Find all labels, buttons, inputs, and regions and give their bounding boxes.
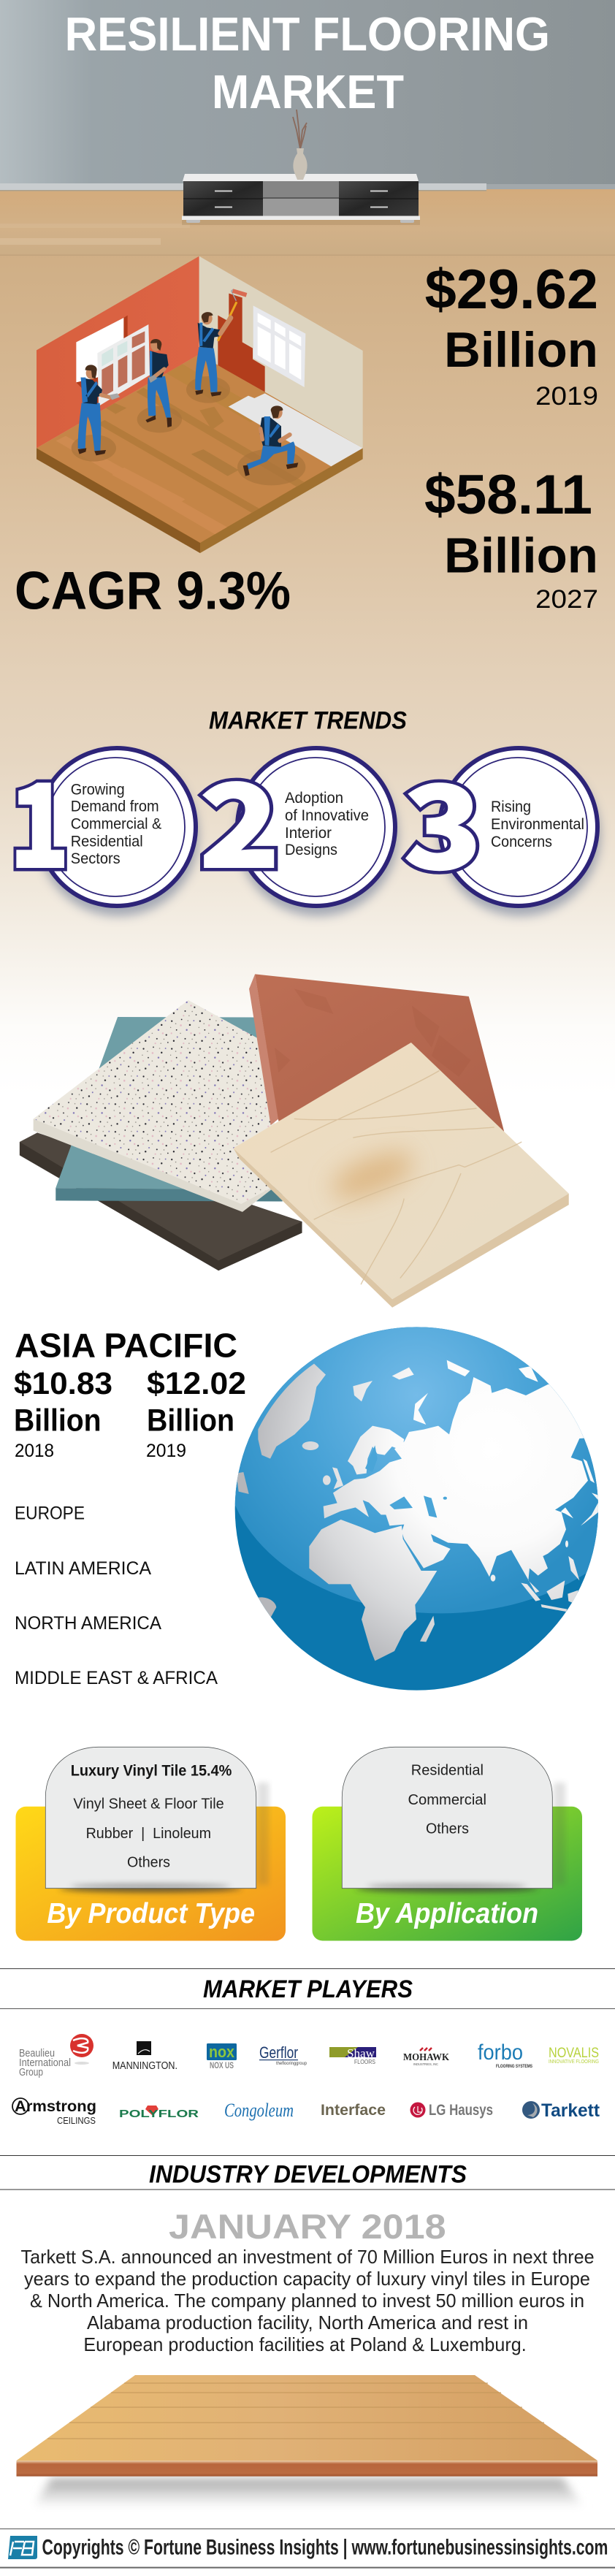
logo: Novalis: NOVALIS [549, 2046, 599, 2061]
other regions list: EUROPE [15, 1504, 85, 1524]
regional heading: Asia Pacific: ASIA PACIFIC [15, 1326, 237, 1364]
trend 1 text: Sectors [71, 850, 121, 867]
development description [20, 2246, 595, 2355]
logo: Beaulieu: Group [19, 2067, 43, 2078]
logo: Tarkett: Tarkett [541, 2100, 600, 2121]
trend 2 text: Interior [285, 825, 332, 842]
market size 2019 [425, 259, 598, 411]
trend 1 [9, 734, 199, 916]
tab with segment list: Commercial [408, 1791, 486, 1808]
tab with segment list [45, 1747, 256, 1889]
market size 2027: Billion [444, 528, 598, 584]
title: RESILIENT FLOORING [65, 7, 550, 61]
regional heading: Asia Pacific: $12.02 [147, 1366, 246, 1401]
worker 2 [137, 339, 182, 432]
trend 2 text: Adoption [285, 790, 343, 807]
other regions list: MIDDLE EAST & AFRICA [15, 1668, 218, 1688]
tab with segment list: Others [127, 1854, 170, 1870]
tab with segment list: Others [426, 1821, 469, 1837]
regional heading: Asia Pacific: 2018 [15, 1441, 54, 1461]
trend 2 text: of Innovative [285, 807, 369, 824]
card: by application [313, 1747, 582, 1940]
beige wall [199, 256, 363, 448]
logo: Beaulieu: International [19, 2057, 71, 2069]
other regions list: LATIN AMERICA [15, 1558, 151, 1579]
red wall [37, 256, 199, 448]
numeral 2: 2 [199, 733, 280, 901]
logo: Beaulieu: Beaulieu [19, 2048, 55, 2059]
floor slab [37, 448, 363, 553]
card label: By Product Type [47, 1898, 255, 1929]
tab shadow [59, 1884, 242, 1893]
logo: LG Hausys: LG Hausys [429, 2102, 493, 2119]
company logos [12, 2034, 600, 2126]
globe [235, 1327, 598, 1691]
beige marble tile [234, 1043, 569, 1308]
logo: NOX US [207, 2043, 237, 2070]
logo: NOX US: NOX US [210, 2060, 234, 2070]
development date: JANUARY 2018 [169, 2207, 446, 2246]
trend 1 text: Growing [71, 781, 125, 798]
trend 3 text: Environmental [491, 816, 584, 833]
trend 3 text: Concerns [491, 834, 552, 850]
development description: Alabama production facility, North America and rest in [87, 2312, 528, 2333]
wooden plank shelf [16, 2375, 597, 2507]
heading: market players: MARKET PLAYERS [203, 1975, 413, 2003]
dark tile [20, 1132, 302, 1270]
logo: LG Hausys [410, 2102, 493, 2119]
regional heading: Asia Pacific: $10.83 [14, 1366, 112, 1401]
logo: Mohawk: INDUSTRIES, INC [413, 2062, 439, 2066]
logo: Forbo: FLOORING SYSTEMS [496, 2064, 532, 2069]
wall [0, 0, 615, 186]
window opening in red wall [76, 316, 128, 404]
terracotta tile [249, 974, 504, 1132]
teal tile [56, 1017, 283, 1202]
tab bottom shading [367, 1883, 527, 1889]
worker 3 with roller [186, 289, 247, 403]
trend 2 [199, 733, 398, 916]
title [65, 7, 550, 118]
regional heading: Asia Pacific: Billion [147, 1403, 234, 1438]
numeral 3: 3 [403, 735, 482, 902]
floor [0, 189, 615, 256]
logo: NOX US: nox [209, 2043, 235, 2061]
market size 2027: 2027 [535, 585, 598, 614]
heading: market trends: MARKET TRENDS [209, 707, 407, 735]
development description: European production facilities at Poland & Luxemburg. [83, 2333, 527, 2355]
painted patch on beige wall [218, 294, 265, 392]
market size 2019: Billion [444, 322, 598, 378]
logo: Beaulieu [19, 2034, 93, 2078]
white tile patch on floor [229, 393, 363, 466]
tab with segment list: Residential [411, 1762, 484, 1779]
title: MARKET [212, 65, 404, 118]
card: by product type [16, 1747, 286, 1940]
numeral 1: 1 [9, 734, 69, 901]
logo: Mohawk: MOHAWK [403, 2052, 449, 2063]
tab shadow [356, 1884, 538, 1893]
vase with branches [293, 110, 308, 180]
trend 1 text: Residential [71, 833, 143, 850]
footer [8, 2535, 608, 2560]
regional heading: Asia Pacific: Billion [14, 1403, 102, 1438]
card label: By Application [356, 1898, 538, 1929]
logo: Novalis: INNOVATIVE FLOORING [549, 2058, 599, 2065]
regional heading: Asia Pacific [14, 1326, 246, 1461]
tab with segment list: Luxury Vinyl Tile 15.4% [71, 1762, 232, 1779]
cabinet [182, 174, 420, 225]
logo: Armstrong Ceilings [12, 2098, 96, 2126]
tab bottom shading [70, 1883, 231, 1889]
trend 1 text: Demand from [71, 798, 159, 815]
speckled terrazzo tile [34, 1000, 275, 1212]
logo: Shaw Floors [329, 2046, 376, 2065]
logo: Armstrong Ceilings: CEILINGS [57, 2115, 96, 2126]
land masses [236, 1360, 604, 1661]
tab with segment list: Vinyl Sheet & Floor Tile [73, 1796, 224, 1813]
trend 3 [403, 735, 600, 916]
worker 1 [72, 365, 120, 462]
market size 2019: 2019 [535, 382, 598, 411]
page background gradient [0, 248, 615, 1198]
logo: Mannington [112, 2041, 177, 2072]
logo: Gerflor: theflooringgroup [276, 2062, 308, 2066]
logo: Armstrong Ceilings: Armstrong [15, 2098, 96, 2115]
trend 1 text [71, 781, 161, 867]
logo: Congoleum: Congoleum [224, 2100, 294, 2121]
other regions list [15, 1504, 218, 1688]
logo: Mannington: MANNINGTON. [112, 2059, 177, 2072]
logo: Gerflor: Gerflor [259, 2043, 298, 2062]
logo: Shaw Floors: Shaw [347, 2046, 375, 2060]
logo: Polyflor [119, 2106, 199, 2120]
numeral 2: 2 [199, 733, 280, 901]
numeral 1: 1 [9, 734, 69, 901]
heading: industry developments: INDUSTRY DEVELOPMENTS [149, 2161, 467, 2189]
inland seas [365, 1445, 447, 1517]
trend 2 text [285, 790, 369, 858]
wall window [253, 305, 305, 387]
trend 1 text: Commercial & [71, 815, 161, 832]
worker 4 kneeling [237, 405, 305, 485]
market size 2027: $58.11 [424, 464, 592, 526]
other regions list: NORTH AMERICA [15, 1613, 161, 1634]
CAGR: CAGR 9.3% [15, 561, 291, 621]
isometric room illustration [37, 256, 363, 553]
logo: Forbo: forbo [478, 2040, 523, 2065]
flooring tile samples [20, 974, 569, 1308]
development description: years to expand the production capacity of luxury vinyl tiles in Europe [24, 2268, 590, 2290]
tab with segment list: Rubber | Linoleum [86, 1825, 211, 1842]
market size 2027 [424, 464, 598, 614]
development description: & North America. The company planned to invest 50 million euros in [30, 2290, 584, 2312]
tab with segment list [342, 1747, 552, 1889]
header room scene [0, 0, 615, 256]
skirting [0, 183, 486, 191]
logo: Interface: Interface [321, 2102, 386, 2119]
market size 2019: $29.62 [425, 259, 598, 321]
numeral 3: 3 [403, 735, 482, 902]
development description: Tarkett S.A. announced an investment of 70 Million Euros in next three [20, 2246, 595, 2268]
logo: Shaw Floors: FLOORS [354, 2058, 375, 2065]
logo: Mohawk [403, 2048, 449, 2066]
trend 3 text [491, 799, 584, 850]
regional heading: Asia Pacific: 2019 [146, 1441, 186, 1461]
trend 2 text: Designs [285, 842, 337, 858]
logo: Polyflor: POLYFLOR [119, 2108, 199, 2120]
icon: company logo [8, 2536, 37, 2559]
held window frame [97, 324, 150, 406]
trend 3 text: Rising [491, 799, 531, 815]
